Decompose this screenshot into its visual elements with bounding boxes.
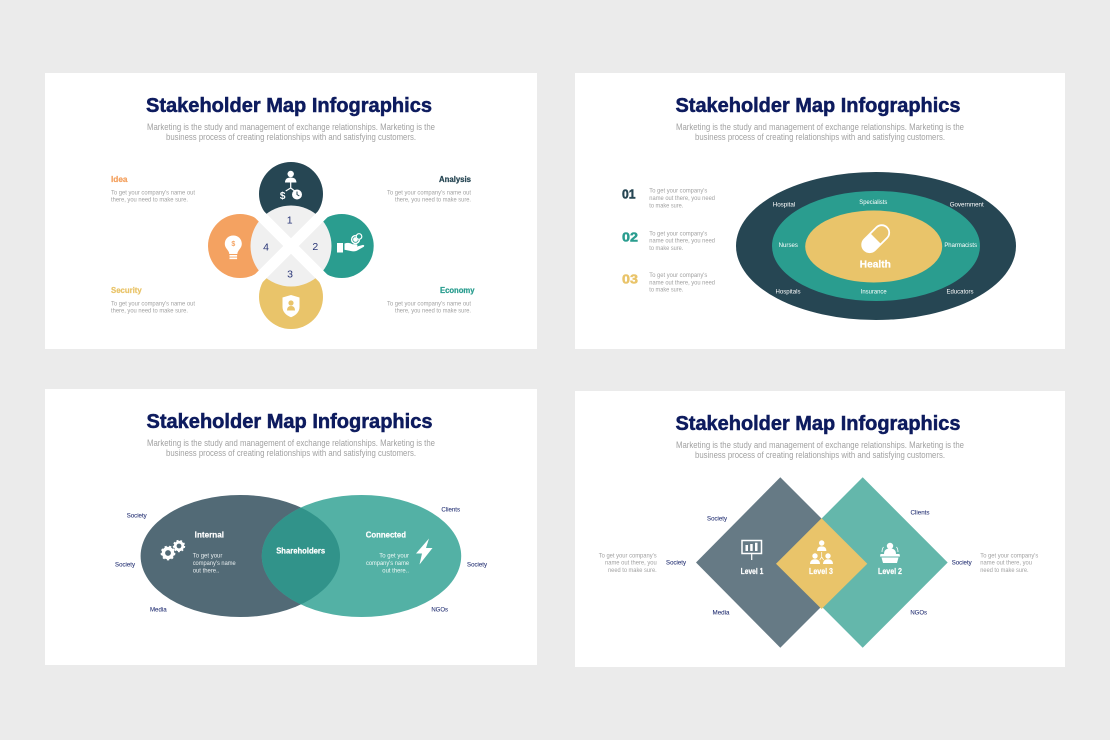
labels: venn outer stakeholders: NGOs [431, 607, 449, 614]
labels: diamond outer stakeholders: Society [952, 560, 972, 567]
text block: Idea: Idea [111, 175, 128, 184]
labels: diamond outer stakeholders: Clients [910, 510, 930, 517]
chart: nested ellipses: Specialists [859, 199, 888, 206]
text block: Connected: Connected [366, 531, 406, 540]
list item 03: 03 [622, 271, 638, 286]
labels: venn outer stakeholders: Media [150, 607, 167, 614]
chart: nested ellipses: Hospital [773, 202, 796, 209]
text block: Economy: To get your company's name out [387, 300, 471, 308]
chart: three diamonds [696, 477, 948, 648]
labels: diamond outer stakeholders: NGOs [910, 610, 928, 617]
icon: speaker at podium [880, 543, 900, 563]
text block: Idea: there, you need to make sure. [111, 197, 188, 204]
chart: venn diagram: Shareholders [276, 547, 326, 556]
chart: nested ellipses: Government [950, 202, 984, 209]
text block: Security: there, you need to make sure. [111, 308, 188, 315]
panel: overlapping diamonds [575, 391, 1065, 667]
chart: nested ellipses: Educators [946, 288, 974, 295]
text block: panel 4 intro [676, 440, 964, 460]
chart: three diamonds: Level 3 [809, 567, 833, 576]
text block: Analysis: there, you need to make sure. [395, 197, 471, 204]
chart: four petals with numbered centre [208, 162, 374, 329]
text block: Economy: there, you need to make sure. [395, 308, 471, 315]
panel: overlapping venn ellipses [45, 389, 537, 665]
chart: four petals with numbered centre: 3 [287, 268, 293, 280]
icon: gears [162, 541, 184, 560]
text block: right note [980, 552, 1038, 574]
icon: light bulb: $ [231, 241, 235, 248]
list item 01 [622, 186, 715, 209]
text block: Internal: To get your [193, 553, 223, 560]
chart: nested ellipses: Pharmacists [944, 242, 978, 249]
text block: panel 4 intro: Marketing is the study and management of exchange relationships. Marketing is the [676, 440, 964, 450]
labels: diamond outer stakeholders [666, 510, 972, 617]
icon: team hierarchy [810, 540, 833, 564]
list item 02: to make sure. [649, 245, 683, 252]
text block: left note: need to make sure. [608, 567, 657, 574]
text block: Analysis: Analysis [439, 175, 472, 184]
panel: four-petal stakeholder map [45, 73, 537, 349]
text block: left note [599, 552, 657, 574]
text block: Analysis: To get your company's name out [387, 190, 471, 196]
list item 01: to make sure. [649, 202, 683, 209]
text block: right note: name out there, you [980, 560, 1032, 567]
chart: four petals with numbered centre: 4 [263, 242, 269, 254]
list item 03: to make sure. [649, 287, 683, 294]
text block: Security [111, 286, 195, 315]
text block: Connected [366, 531, 410, 574]
labels: diamond outer stakeholders: Society [666, 560, 687, 567]
icon: light bulb [225, 236, 242, 259]
list item 02: name out there, you need [649, 238, 715, 245]
list item 01: 01 [622, 186, 636, 202]
text block: panel 3 intro [147, 438, 435, 458]
text block: left note: To get your company's [599, 552, 657, 559]
text block: panel 1 intro: business process of creating relationships with and satisfying customers. [166, 132, 416, 142]
labels: diamond outer stakeholders: Media [712, 610, 730, 617]
chart: three diamonds: Level 2 [878, 567, 902, 576]
icon: shield with person [282, 295, 300, 317]
chart: venn diagram [141, 495, 461, 617]
list item 03 [622, 271, 715, 294]
panel: concentric health ellipses [575, 73, 1065, 349]
list item 02 [622, 230, 715, 252]
labels: venn outer stakeholders: Society [467, 562, 488, 569]
text block: Economy: Economy [440, 286, 475, 295]
icon: lightning bolt [416, 538, 432, 564]
text block: Internal: out there.. [193, 567, 220, 574]
chart: nested ellipses: Health [860, 258, 891, 270]
icon: person, money and clock: $ [280, 191, 286, 202]
chart: nested ellipses: Insurance [861, 288, 887, 295]
chart: four petals with numbered centre: 2 [312, 241, 318, 253]
labels: venn outer stakeholders: Society [115, 562, 136, 569]
text block: Internal [193, 531, 236, 574]
text block: panel 1 intro: Marketing is the study and management of exchange relationships. Marketing is the [147, 122, 435, 132]
heading: panel 2 title: Stakeholder Map Infographics [676, 95, 960, 117]
icon: hand holding coins [337, 233, 364, 252]
text block: panel 3 intro: business process of creating relationships with and satisfying customers. [166, 448, 416, 458]
text block: right note: need to make sure. [980, 567, 1029, 574]
labels: venn outer stakeholders: Society [127, 512, 147, 520]
heading: panel 4 title: Stakeholder Map Infographics [676, 413, 960, 435]
text block: panel 2 intro: Marketing is the study and management of exchange relationships. Marketing is the [676, 122, 964, 132]
chart: four petals with numbered centre: 1 [287, 214, 293, 226]
labels: venn outer stakeholders [115, 506, 488, 614]
list item 02: 02 [622, 230, 638, 245]
list item 02: To get your company's [649, 230, 707, 237]
list item 01: To get your company's [649, 188, 707, 195]
labels: diamond outer stakeholders: Society [707, 516, 728, 523]
text block: panel 4 intro: business process of creating relationships with and satisfying customers. [695, 450, 945, 460]
heading: panel 3 title: Stakeholder Map Infographics [146, 411, 432, 433]
list item 01: name out there, you need [649, 195, 715, 202]
labels: venn outer stakeholders: Clients [441, 506, 461, 513]
text block: panel 3 intro: Marketing is the study and management of exchange relationships. Marketing is the [147, 438, 435, 448]
text block: Connected: out there.. [382, 567, 409, 574]
text block: Idea: To get your company's name out [111, 190, 195, 196]
text block: Economy [387, 286, 475, 315]
icon: presentation board [742, 540, 762, 560]
chart: nested ellipses: Hospitals [776, 288, 801, 295]
chart: three diamonds: Level 1 [741, 567, 764, 576]
heading: panel 1 title: Stakeholder Map Infographics [146, 95, 432, 117]
text block: right note: To get your company's [980, 552, 1038, 559]
list item 03: name out there, you need [649, 279, 715, 286]
icon: person, money and clock [280, 171, 302, 202]
text block: panel 1 intro [147, 122, 435, 142]
list item 03: To get your company's [649, 272, 707, 279]
text block: left note: name out there, you [605, 560, 657, 567]
chart: nested ellipses: Nurses [779, 242, 799, 249]
chart: nested ellipses [736, 172, 1016, 320]
text block: Idea [111, 175, 195, 204]
text block: Internal: company's name [193, 560, 236, 567]
text block: panel 2 intro [676, 122, 964, 142]
text block: Security: Security [111, 286, 142, 295]
text block: Connected: company's name [366, 560, 409, 567]
icon: pill capsule [859, 222, 892, 255]
text block: panel 2 intro: business process of creating relationships with and satisfying customers. [695, 132, 945, 142]
text block: Internal: Internal [195, 531, 224, 540]
text block: Connected: To get your [379, 553, 410, 560]
text block: Security: To get your company's name out [111, 300, 195, 308]
text block: Analysis [387, 175, 472, 204]
